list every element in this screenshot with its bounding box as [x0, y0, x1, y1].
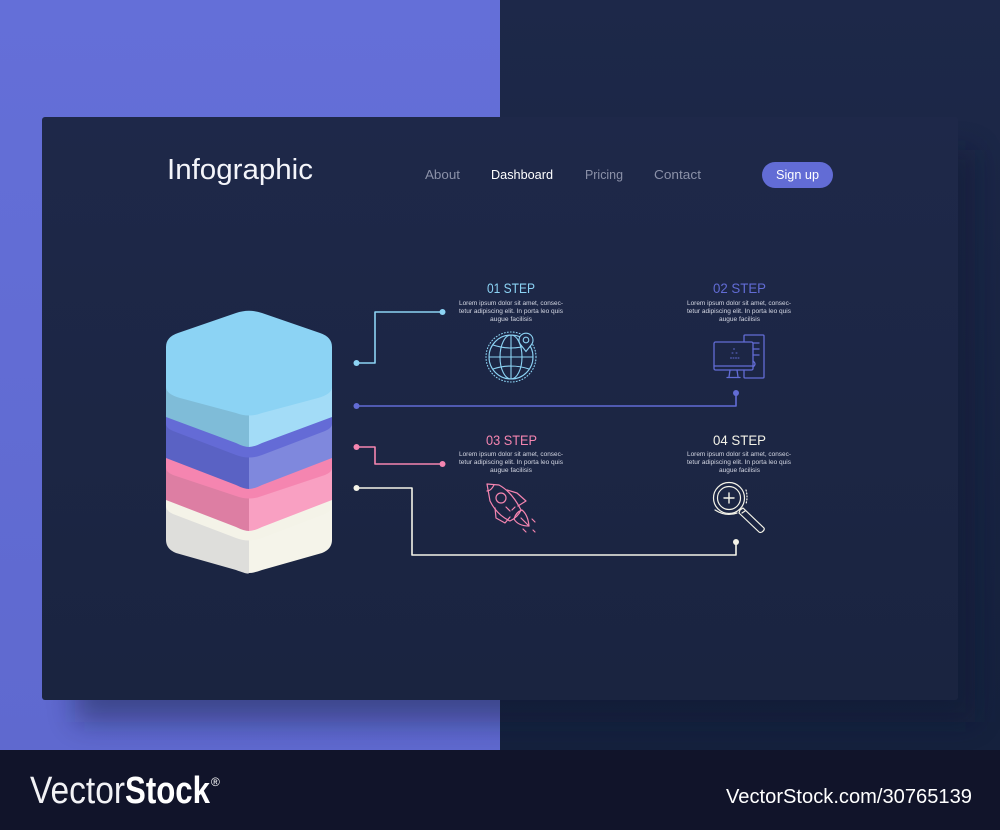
navigation: About	[425, 167, 460, 182]
step 2 text	[687, 280, 791, 323]
navigation: Dashboard	[491, 167, 553, 182]
step 1 text: 01 STEP	[487, 280, 535, 296]
step 2 text: 02 STEP	[713, 280, 766, 296]
step 1 text: Lorem ipsum dolor sit amet, consec-	[459, 301, 563, 307]
step 4 text: tetur adipiscing elit. In porta leo quis	[687, 460, 791, 466]
background: dark panel	[500, 0, 1000, 750]
step 2 text: augue facilisis	[719, 317, 760, 323]
navigation	[425, 167, 701, 182]
step 4 text: augue facilisis	[719, 468, 760, 474]
connector: step 3	[354, 444, 446, 467]
background: purple panel	[0, 0, 500, 750]
step 1 text	[459, 280, 563, 323]
navigation: Contact	[654, 167, 701, 182]
step 3 text	[459, 432, 563, 474]
layer: pink	[166, 455, 332, 531]
card shadow	[75, 150, 975, 722]
footer bar	[0, 750, 1000, 830]
connector: step 4	[354, 485, 739, 555]
icon: magnifier	[714, 482, 764, 532]
step 3 text: augue facilisis	[490, 468, 532, 474]
step 4 text: Lorem ipsum dolor sit amet, consec-	[687, 452, 791, 458]
layer: cream	[166, 495, 332, 574]
connector: step 1	[354, 309, 446, 366]
step 2 text: Lorem ipsum dolor sit amet, consec-	[687, 301, 791, 307]
main card	[42, 117, 958, 700]
layer: purple	[166, 414, 332, 489]
step 1 text: augue facilisis	[490, 317, 532, 323]
navigation: Pricing	[585, 167, 623, 182]
step 3 text: 03 STEP	[486, 432, 537, 448]
sign up button: Sign up	[776, 167, 819, 182]
icon: globe with pin	[486, 332, 536, 382]
step 3 text: Lorem ipsum dolor sit amet, consec-	[459, 452, 563, 458]
sign up button	[762, 162, 833, 188]
icon: rocket	[487, 484, 535, 532]
step 1 text: tetur adipiscing elit. In porta leo quis	[459, 309, 563, 315]
footer bar: Vector	[30, 770, 125, 812]
step 3 text: tetur adipiscing elit. In porta leo quis	[459, 460, 563, 466]
step 4 text: 04 STEP	[713, 432, 766, 448]
layered stack	[166, 311, 332, 574]
footer bar: VectorStock.com/30765139	[726, 786, 972, 808]
step 2 text: tetur adipiscing elit. In porta leo quis	[687, 309, 791, 315]
connector: step 2	[354, 390, 739, 409]
step 4 text	[687, 432, 791, 474]
title: Infographic	[167, 154, 313, 186]
footer bar: ®	[211, 775, 220, 789]
layer: blue	[166, 311, 332, 447]
icon: desktop computer	[714, 335, 764, 378]
footer bar: Stock	[125, 770, 211, 812]
